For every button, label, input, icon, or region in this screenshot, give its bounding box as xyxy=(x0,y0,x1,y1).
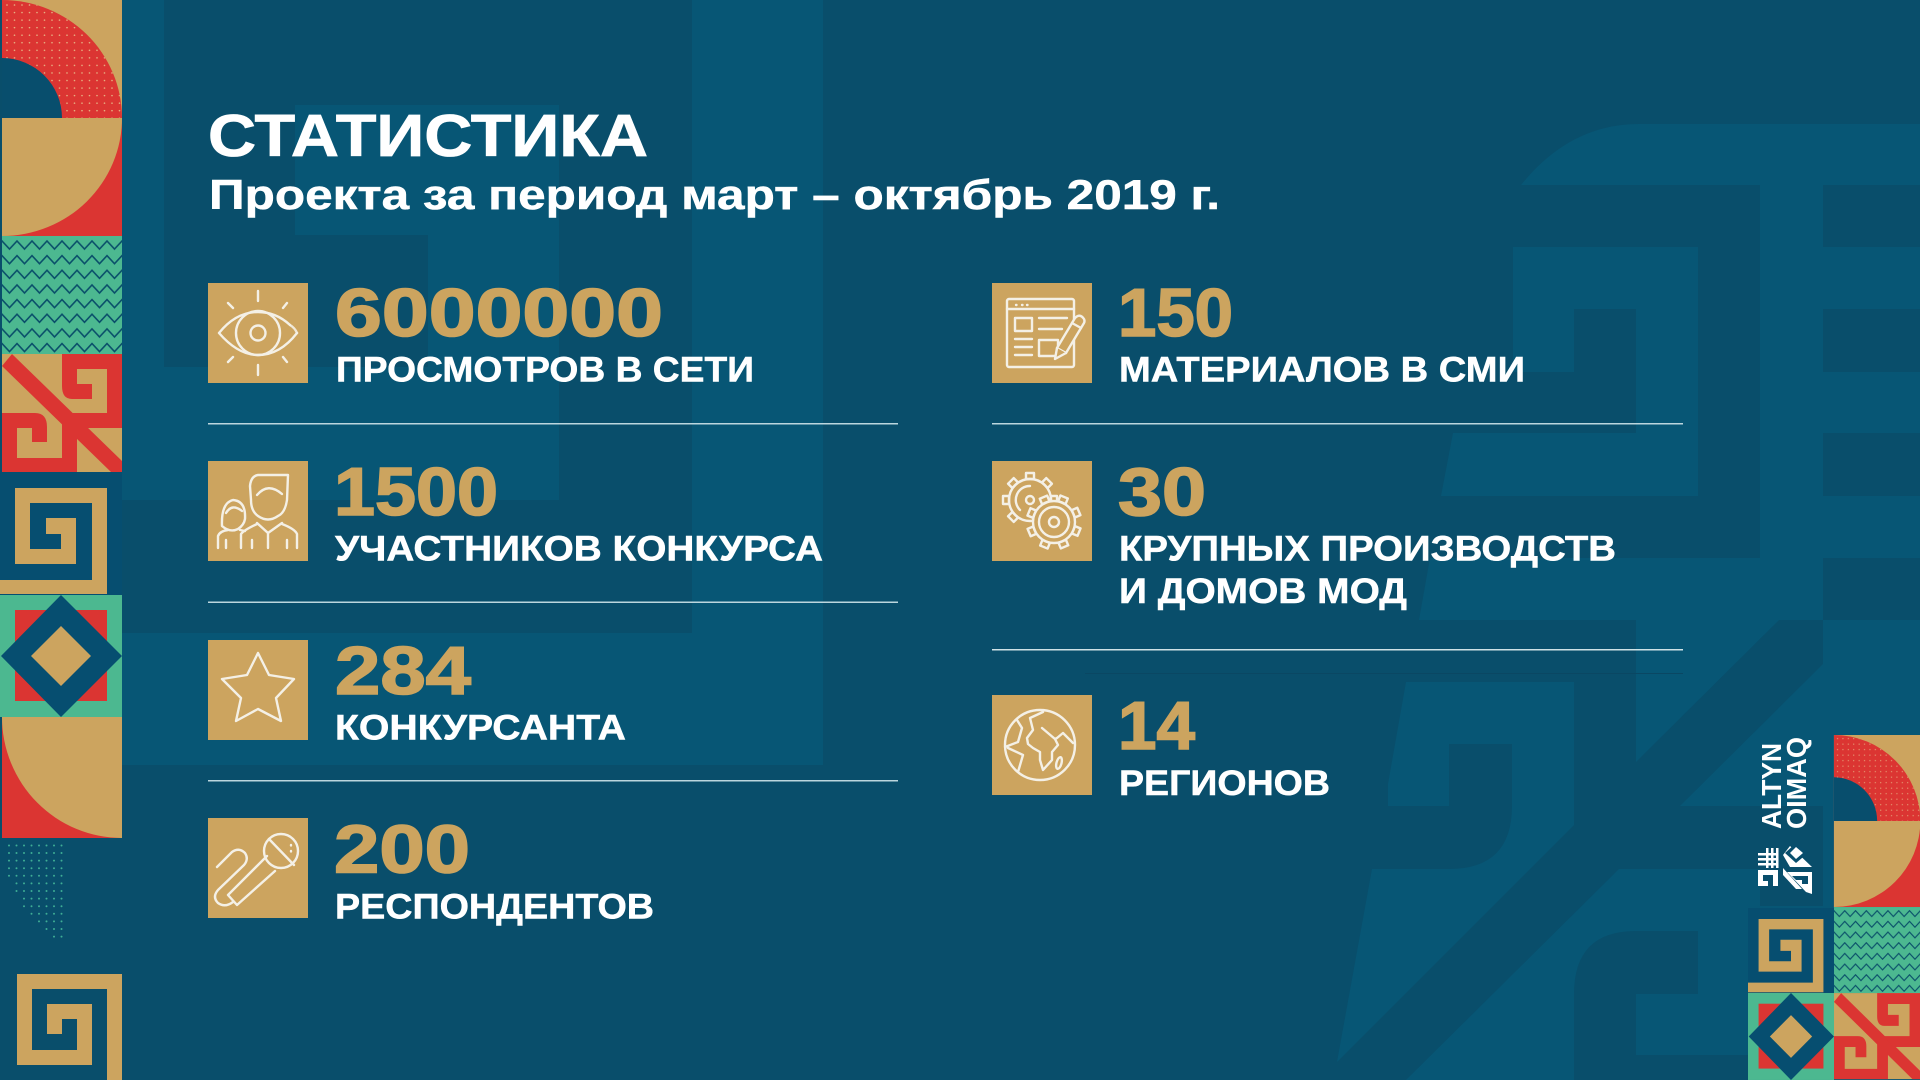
stat: views xyxy=(208,275,754,390)
label: РЕГИОНОВ xyxy=(1119,764,1330,803)
icon: microphone xyxy=(208,818,308,918)
left ornament strip xyxy=(0,0,122,1080)
label: МАТЕРИАЛОВ В СМИ xyxy=(1119,350,1525,390)
value: 150 xyxy=(1118,275,1233,351)
icon: globe xyxy=(992,695,1092,795)
stat: contest participants xyxy=(208,454,823,568)
stat: manufacturers and fashion houses xyxy=(992,454,1616,611)
title: СТАТИСТИКА xyxy=(208,103,648,169)
background pattern: lower hook xyxy=(1574,806,1823,1080)
value: 30 xyxy=(1118,454,1206,530)
label: КОНКУРСАНТА xyxy=(335,708,626,748)
icon: news and pencil xyxy=(992,283,1092,383)
label line two: И ДОМОВ МОД xyxy=(1119,572,1407,611)
value: 14 xyxy=(1118,688,1195,764)
stat: contestants xyxy=(208,633,626,748)
logo: OIMAQ xyxy=(1781,737,1812,829)
right ornament block xyxy=(1748,735,1920,1080)
stat: respondents xyxy=(208,812,654,926)
icon: gears xyxy=(992,461,1092,561)
label: ПРОСМОТРОВ В СЕТИ xyxy=(336,350,754,390)
label: УЧАСТНИКОВ КОНКУРСА xyxy=(335,530,823,568)
subtitle: Проекта за период март – октябрь 2019 г. xyxy=(209,171,1220,218)
background pattern: right ornament xyxy=(1337,124,1920,1080)
logo: ALTYN xyxy=(1756,743,1787,829)
value: 1500 xyxy=(334,454,498,530)
label: КРУПНЫХ ПРОИЗВОДСТВ xyxy=(1119,530,1616,568)
value: 6000000 xyxy=(335,275,663,351)
label: РЕСПОНДЕНТОВ xyxy=(335,888,654,926)
background pattern: left ornament xyxy=(122,0,823,765)
icon: people xyxy=(208,461,308,561)
icon: eye xyxy=(208,283,308,383)
stat: media materials xyxy=(992,275,1525,390)
value: 284 xyxy=(335,633,471,709)
stat: regions xyxy=(992,688,1330,803)
value: 200 xyxy=(334,812,470,888)
logo xyxy=(1756,737,1812,894)
icon: star xyxy=(208,640,308,740)
